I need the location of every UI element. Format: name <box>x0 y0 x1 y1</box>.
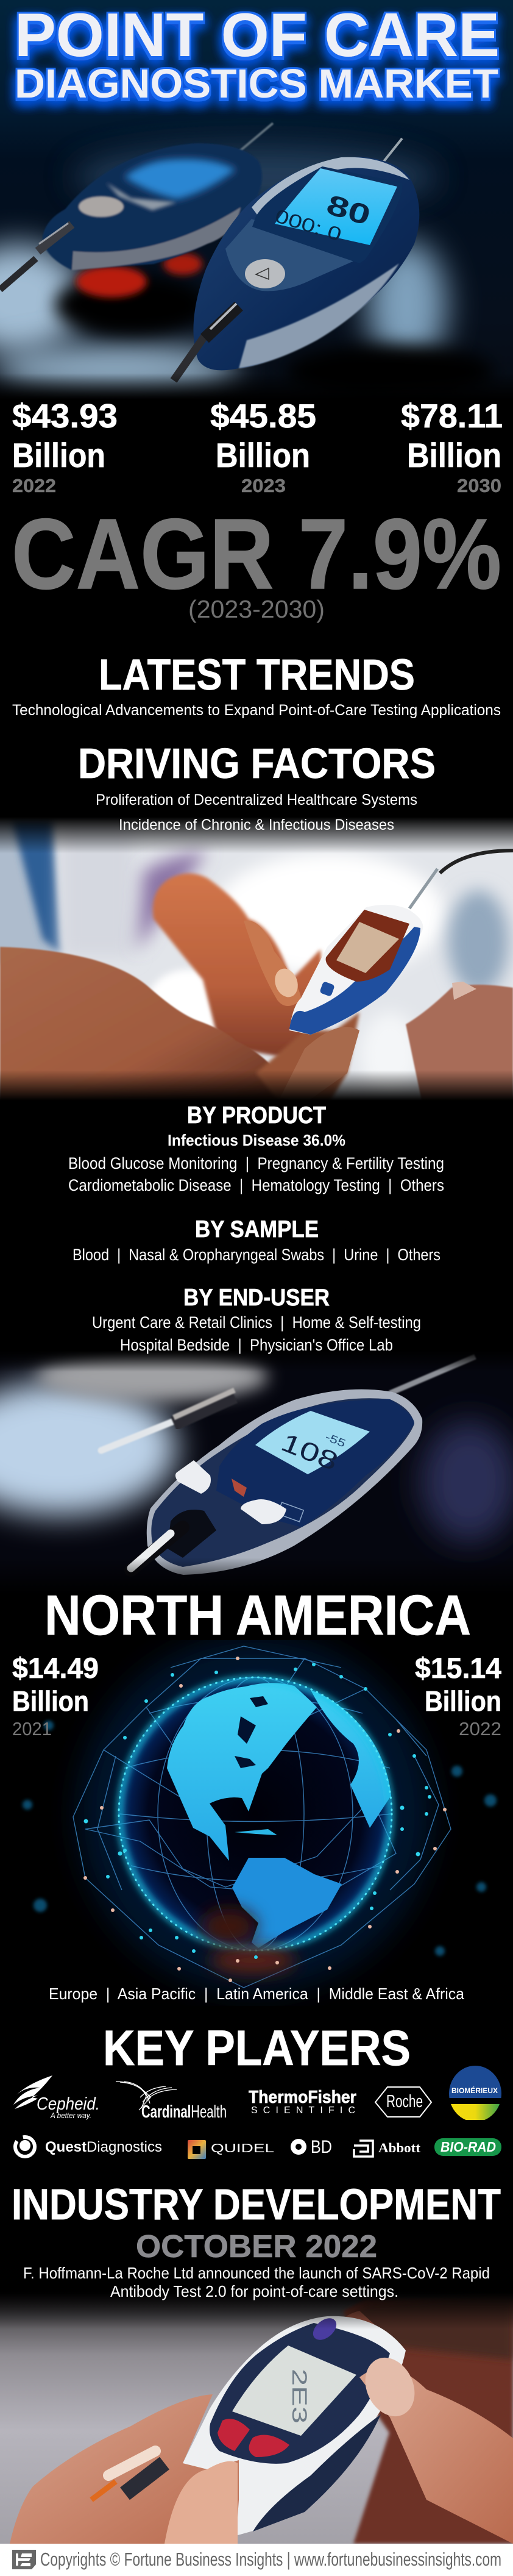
logo: Quest Diagnostics: QuestDiagnostics <box>45 2139 162 2155</box>
other regions list: Europe | Asia Pacific | Latin America | Middle East & Africa <box>49 1985 465 2003</box>
stat: North America 2021: Billion <box>12 1685 89 1717</box>
logo: Abbott: Abbott <box>378 2140 421 2155</box>
logo: bioMerieux <box>449 2066 501 2122</box>
title: POINT OF CARE <box>15 1 500 70</box>
logo: Bio-Rad: BIO-RAD <box>440 2139 496 2155</box>
title: DIAGNOSTICS MARKET <box>15 61 498 107</box>
logo: Cepheid <box>13 2075 100 2120</box>
footer bar <box>0 2544 513 2576</box>
stat: 2030 market size: 2030 <box>457 475 501 496</box>
region heading: North America: NORTH AMERICA <box>44 1583 471 1647</box>
logo: Thermo Fisher Scientific <box>249 2088 356 2116</box>
stat: 2022 market size: $43.93 <box>12 397 118 435</box>
by product segment <box>68 1102 444 1194</box>
stat: 2022 market size: Billion <box>12 436 105 474</box>
by sample segment: Blood | Nasal & Oropharyngeal Swabs | Urine | Others <box>73 1246 440 1264</box>
logo: BD <box>291 2137 332 2157</box>
meter on table image: -55 <box>324 1430 347 1450</box>
stat: North America 2022: Billion <box>425 1685 501 1717</box>
logo: Thermo Fisher Scientific: SCIENTIFIC <box>251 2105 355 2116</box>
by product segment: Blood Glucose Monitoring | Pregnancy & Fertility Testing <box>68 1154 444 1172</box>
stat: North America 2022 <box>415 1652 501 1739</box>
logo: Abbott <box>354 2140 421 2157</box>
hero image: two glucose meters <box>0 0 513 399</box>
latest trends <box>12 651 501 719</box>
stat: 2030 market size: Billion <box>407 436 501 474</box>
by end-user segment <box>92 1285 421 1354</box>
by end-user segment: BY END-USER <box>183 1285 330 1311</box>
meter on table image <box>0 1350 513 1594</box>
hero image: two glucose meters: 000: 0 <box>272 205 344 245</box>
stat: 2030 market size <box>401 397 503 496</box>
driving factors heading: DRIVING FACTORS <box>78 740 436 787</box>
globe illustration <box>23 1637 497 1991</box>
stat: North America 2022: 2022 <box>459 1718 501 1739</box>
logo: Thermo Fisher Scientific: ThermoFisher <box>249 2088 356 2107</box>
logo: Cardinal Health <box>116 2082 227 2122</box>
meter on table image: 108 <box>277 1427 342 1476</box>
logo: Roche: Roche <box>386 2092 423 2111</box>
stat: North America 2021: 2021 <box>12 1718 52 1739</box>
logo: BD: BD <box>311 2137 332 2157</box>
by sample segment: BY SAMPLE <box>195 1216 319 1243</box>
CAGR headline: (2023-2030) <box>188 595 325 623</box>
hands holding meter image <box>0 817 513 1104</box>
driving factors text: Proliferation of Decentralized Healthcare Systems <box>96 791 417 808</box>
logo: Cepheid: A better way. <box>50 2111 91 2120</box>
industry development image: 2E3 <box>288 2369 311 2424</box>
logo: Quest Diagnostics <box>15 2137 162 2157</box>
logo: bioMerieux: BIOMÉRIEUX <box>451 2086 498 2095</box>
stat: North America 2021 <box>12 1652 99 1739</box>
logo: Cardinal Health: CardinalHealth <box>141 2102 227 2122</box>
stat: 2023 market size: $45.85 <box>210 397 316 435</box>
driving factors text <box>96 791 417 833</box>
icon: Fortune Business Insights mark <box>12 2550 36 2569</box>
stat: 2023 market size: Billion <box>216 436 310 474</box>
driving factors text: Incidence of Chronic & Infectious Diseases <box>119 816 394 833</box>
by end-user segment: Urgent Care & Retail Clinics | Home & Self-testing <box>92 1313 421 1332</box>
industry development image <box>0 2292 513 2544</box>
by product segment: Cardiometabolic Disease | Hematology Testing | Others <box>68 1176 444 1194</box>
stat: North America 2021: $14.49 <box>12 1652 99 1684</box>
by sample segment <box>73 1216 440 1264</box>
industry development text: Antibody Test 2.0 for point-of-care settings. <box>110 2282 398 2300</box>
by product segment: BY PRODUCT <box>187 1102 326 1129</box>
stat: 2022 market size: 2022 <box>12 475 56 496</box>
logo: Quidel: QUIDEL <box>211 2142 274 2155</box>
latest trends: Technological Advancements to Expand Point-of-Care Testing Applications <box>12 702 501 719</box>
stat: 2023 market size: 2023 <box>241 475 286 496</box>
stat: 2030 market size: $78.11 <box>401 397 503 435</box>
key players heading: KEY PLAYERS <box>103 2021 411 2076</box>
logo: Cepheid: Cepheid. <box>37 2094 100 2114</box>
industry development text <box>23 2264 490 2300</box>
stat: 2022 market size <box>12 397 118 496</box>
by end-user segment: Hospital Bedside | Physician's Office Lab <box>120 1336 393 1354</box>
industry development date: OCTOBER 2022 <box>136 2229 377 2264</box>
latest trends: LATEST TRENDS <box>99 651 415 699</box>
logo: Roche <box>375 2087 431 2117</box>
hero image: two glucose meters: 80 <box>323 188 374 231</box>
title <box>15 1 500 107</box>
stat: 2023 market size <box>210 397 316 496</box>
stat: North America 2022: $15.14 <box>415 1652 501 1684</box>
logo: Quidel <box>188 2140 274 2159</box>
by product segment: Infectious Disease 36.0% <box>168 1131 345 1149</box>
